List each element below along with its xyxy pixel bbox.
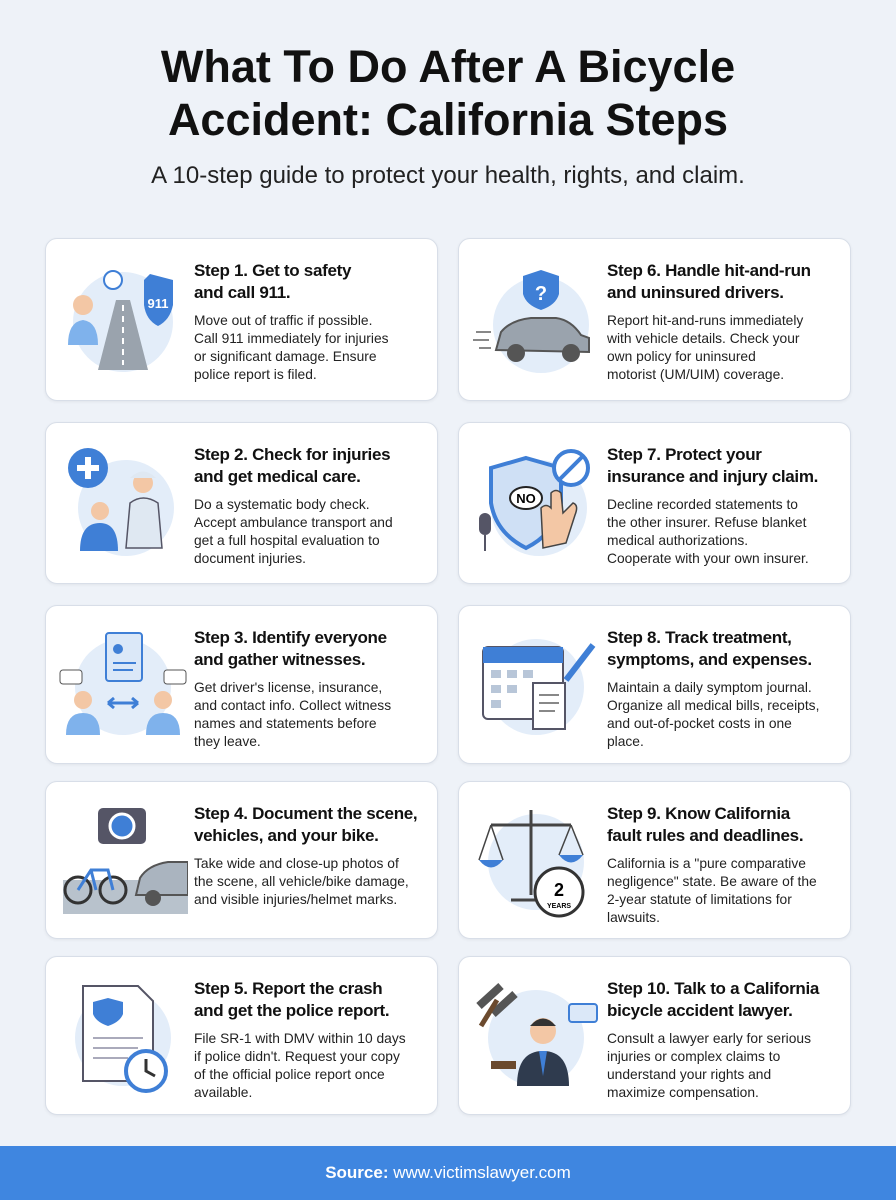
card: step 6: Report hit-and-runs immediately <box>607 313 803 328</box>
icon: person calling 911: 911 <box>148 296 168 310</box>
footer: source: Source: www.victimslawyer.com <box>325 1163 571 1182</box>
card: step 1: police report is filed. <box>194 367 317 382</box>
card: step 3 <box>45 605 438 764</box>
title: What To Do After A Bicycle <box>161 41 735 92</box>
subtitle: A 10-step guide to protect your health, rights, and claim. <box>151 162 745 189</box>
card: step 10: Consult a lawyer early for serious <box>607 1031 811 1046</box>
card: step 8 <box>458 605 851 764</box>
card: step 3: and contact info. Collect witness <box>194 698 391 713</box>
card: step 9: 2-year statute of limitations for <box>607 892 792 907</box>
icon: car with question shield <box>473 270 590 373</box>
icon: scale and 2 years: YEARS <box>547 903 571 910</box>
icon: scale and 2 years <box>478 810 584 918</box>
card: step 10 <box>458 956 851 1115</box>
icon: calendar and receipt <box>482 639 596 735</box>
card: step 10: Step 10. Talk to a California <box>607 979 819 998</box>
card: step 7: medical authorizations. <box>607 533 748 548</box>
card: step 8: and out-of-pocket costs in one <box>607 716 792 731</box>
icon: medic helping person <box>68 448 174 556</box>
card: step 3: and gather witnesses. <box>194 650 365 669</box>
card: step 2: Do a systematic body check. <box>194 497 370 512</box>
card: step 3: Step 3. Identify everyone <box>194 628 387 647</box>
icon: NO shield and hand <box>479 449 590 556</box>
card: step 3: Get driver's license, insurance, <box>194 680 382 695</box>
footer: source <box>0 1146 896 1200</box>
card: step 5: if police didn't. Request your copy <box>194 1049 400 1064</box>
card: step 9: negligence" state. Be aware of the <box>607 874 817 889</box>
card: step 7: Cooperate with your own insurer. <box>607 551 809 566</box>
icon: lawyer with gavel <box>476 983 598 1086</box>
card: step 5: of the official police report once <box>194 1067 385 1082</box>
card: step 10: injuries or complex claims to <box>607 1049 780 1064</box>
card: step 1: Move out of traffic if possible. <box>194 313 372 328</box>
card: step 5 <box>45 956 438 1115</box>
card: step 4: Take wide and close-up photos of <box>194 856 399 871</box>
card: step 6: Step 6. Handle hit-and-run <box>607 261 811 280</box>
card: step 6: with vehicle details. Check your <box>607 331 799 346</box>
icon: person calling 911 <box>68 270 173 372</box>
card: step 1: and call 911. <box>194 283 290 302</box>
card: step 6 <box>458 238 851 401</box>
card: step 9: lawsuits. <box>607 910 660 925</box>
card: step 7: Step 7. Protect your <box>607 445 762 464</box>
icon: NO shield and hand: NO <box>516 491 536 506</box>
card: step 4 <box>45 781 438 939</box>
card: step 7: insurance and injury claim. <box>607 467 818 486</box>
card: step 4: Step 4. Document the scene, <box>194 804 417 823</box>
card: step 6: own policy for uninsured <box>607 349 756 364</box>
card: step 8: Organize all medical bills, receipts, <box>607 698 819 713</box>
card: step 2: Accept ambulance transport and <box>194 515 393 530</box>
card: step 8: Step 8. Track treatment, <box>607 628 792 647</box>
card: step 1: or significant damage. Ensure <box>194 349 377 364</box>
card: step 9 <box>458 781 851 939</box>
card: step 7: the other insurer. Refuse blanket <box>607 515 806 530</box>
card: step 6: and uninsured drivers. <box>607 283 784 302</box>
card: step 2: Step 2. Check for injuries <box>194 445 390 464</box>
card: step 7: Decline recorded statements to <box>607 497 798 512</box>
card: step 9: Step 9. Know California <box>607 804 790 823</box>
card: step 4: the scene, all vehicle/bike damage, <box>194 874 409 889</box>
card: step 8: Maintain a daily symptom journal. <box>607 680 812 695</box>
card: step 9: California is a "pure comparative <box>607 856 806 871</box>
card: step 8: symptoms, and expenses. <box>607 650 812 669</box>
icon: car with question shield: ? <box>535 282 547 304</box>
card: step 10: bicycle accident lawyer. <box>607 1001 793 1020</box>
card: step 7 <box>458 422 851 584</box>
card: step 6: motorist (UM/UIM) coverage. <box>607 367 784 382</box>
card: step 2: and get medical care. <box>194 467 361 486</box>
card: step 4: and visible injuries/helmet marks. <box>194 892 397 907</box>
card: step 1: Call 911 immediately for injuries <box>194 331 389 346</box>
card: step 5: available. <box>194 1085 252 1100</box>
card: step 10: understand your rights and <box>607 1067 771 1082</box>
card: step 1 <box>45 238 438 401</box>
card: step 5: and get the police report. <box>194 1001 389 1020</box>
card: step 4: vehicles, and your bike. <box>194 826 379 845</box>
card: step 2 <box>45 422 438 584</box>
card: step 3: names and statements before <box>194 716 377 731</box>
card: step 9: fault rules and deadlines. <box>607 826 803 845</box>
icon: police report and clock <box>75 985 171 1093</box>
card: step 2: get a full hospital evaluation to <box>194 533 380 548</box>
icon: two people with clipboard <box>60 632 186 735</box>
title <box>160 41 735 145</box>
card: step 1: Step 1. Get to safety <box>194 261 351 280</box>
card: step 5: Step 5. Report the crash <box>194 979 382 998</box>
title: Accident: California Steps <box>168 94 728 145</box>
card: step 2: document injuries. <box>194 551 306 566</box>
card: step 5: File SR-1 with DMV within 10 days <box>194 1031 406 1046</box>
card: step 3: they leave. <box>194 734 261 749</box>
card: step 10: maximize compensation. <box>607 1085 759 1100</box>
icon: camera bike car <box>63 808 188 914</box>
icon: scale and 2 years: 2 <box>554 880 564 900</box>
card: step 8: place. <box>607 734 644 749</box>
